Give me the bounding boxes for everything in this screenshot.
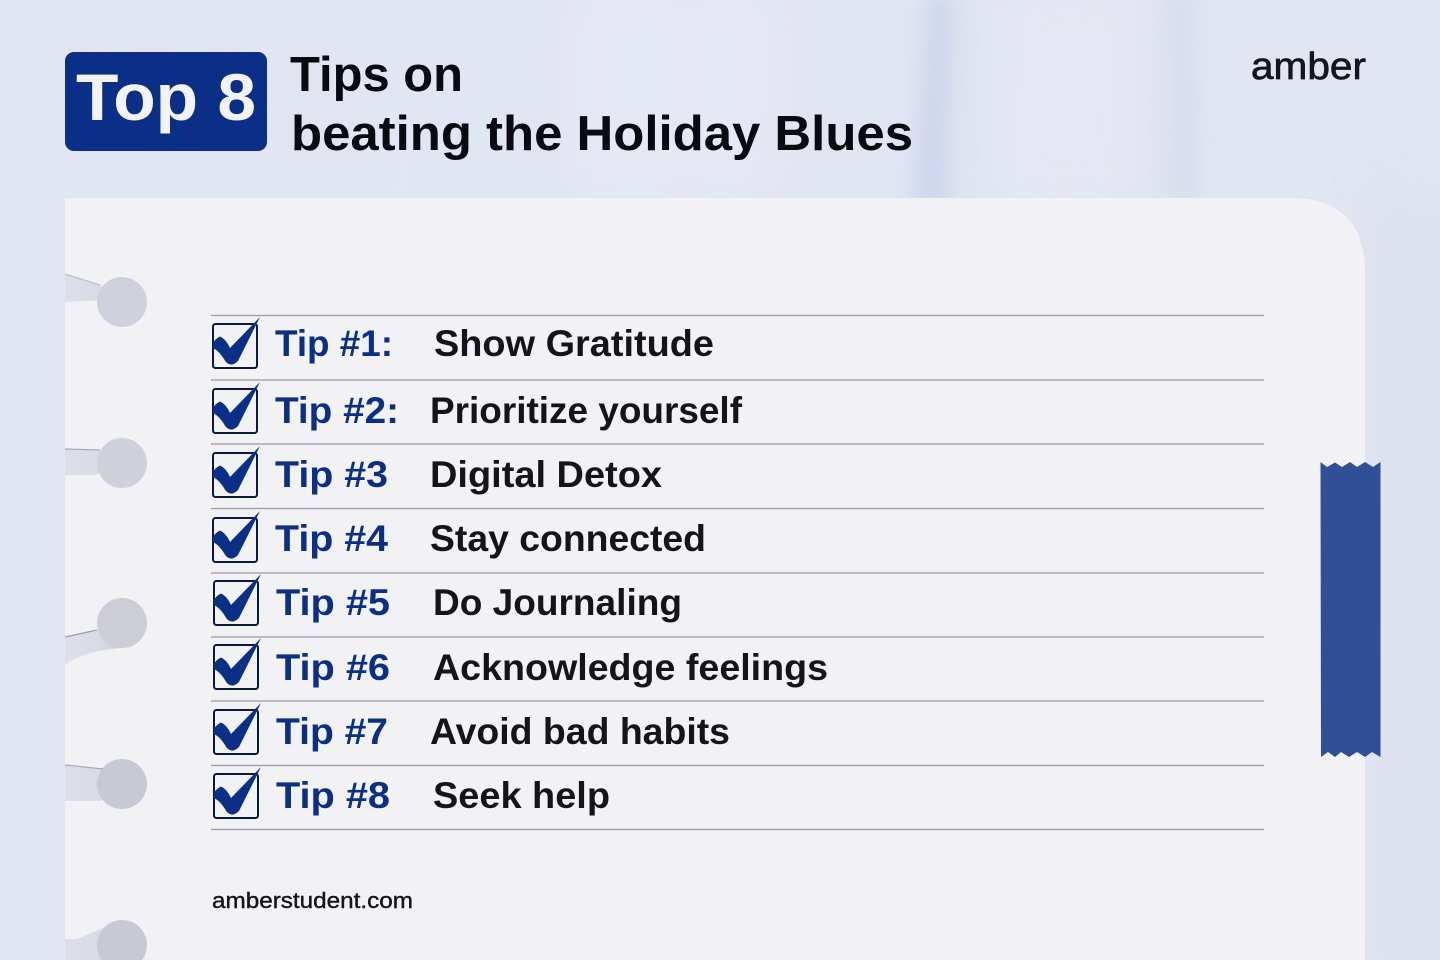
- title: Tips on: [290, 48, 463, 102]
- binder hole 1: [65, 274, 147, 327]
- tip 1: [213, 317, 714, 368]
- tip 6: [214, 638, 828, 689]
- tip 3: Digital Detox: [430, 454, 662, 495]
- icon: blue tape: [1320, 462, 1380, 757]
- ruled lines: [211, 316, 1264, 830]
- tip 4: Stay connected: [430, 518, 706, 559]
- tip 6: Tip #6: [276, 647, 390, 688]
- tip 7: [214, 703, 730, 754]
- tip 7: Tip #7: [276, 711, 388, 752]
- website url: amberstudent.com: [212, 888, 413, 913]
- logo: amber: amber: [1251, 46, 1366, 88]
- tip 5: Do Journaling: [433, 582, 682, 623]
- tip 3: [213, 446, 662, 497]
- binder hole 5: [65, 920, 147, 960]
- tip 8: Tip #8: [276, 775, 390, 816]
- tip 6: Acknowledge feelings: [433, 647, 828, 688]
- tip 3: Tip #3: [275, 454, 388, 495]
- panel: notebook paper: [65, 198, 1365, 960]
- tip 4: [213, 511, 706, 562]
- badge: Top 8: [65, 52, 267, 151]
- tip 4: Tip #4: [275, 518, 388, 559]
- badge: Top 8: Top 8: [76, 60, 256, 134]
- tip 1: Show Gratitude: [434, 323, 714, 364]
- tip 2: Tip #2:: [275, 390, 399, 431]
- tip 2: Prioritize yourself: [430, 390, 743, 431]
- tip 1: Tip #1:: [275, 323, 393, 364]
- binder hole 4: [65, 759, 147, 809]
- tip 8: [214, 767, 610, 818]
- tip 7: Avoid bad habits: [430, 711, 730, 752]
- title: [290, 48, 913, 161]
- binder hole 3: [65, 598, 147, 665]
- tip 2: [213, 382, 743, 433]
- tip 5: Tip #5: [276, 582, 390, 623]
- binder hole 2: [65, 438, 147, 488]
- checklist: [213, 317, 828, 818]
- tip 5: [214, 574, 682, 625]
- tip 8: Seek help: [433, 775, 610, 816]
- title: beating the Holiday Blues: [291, 107, 913, 161]
